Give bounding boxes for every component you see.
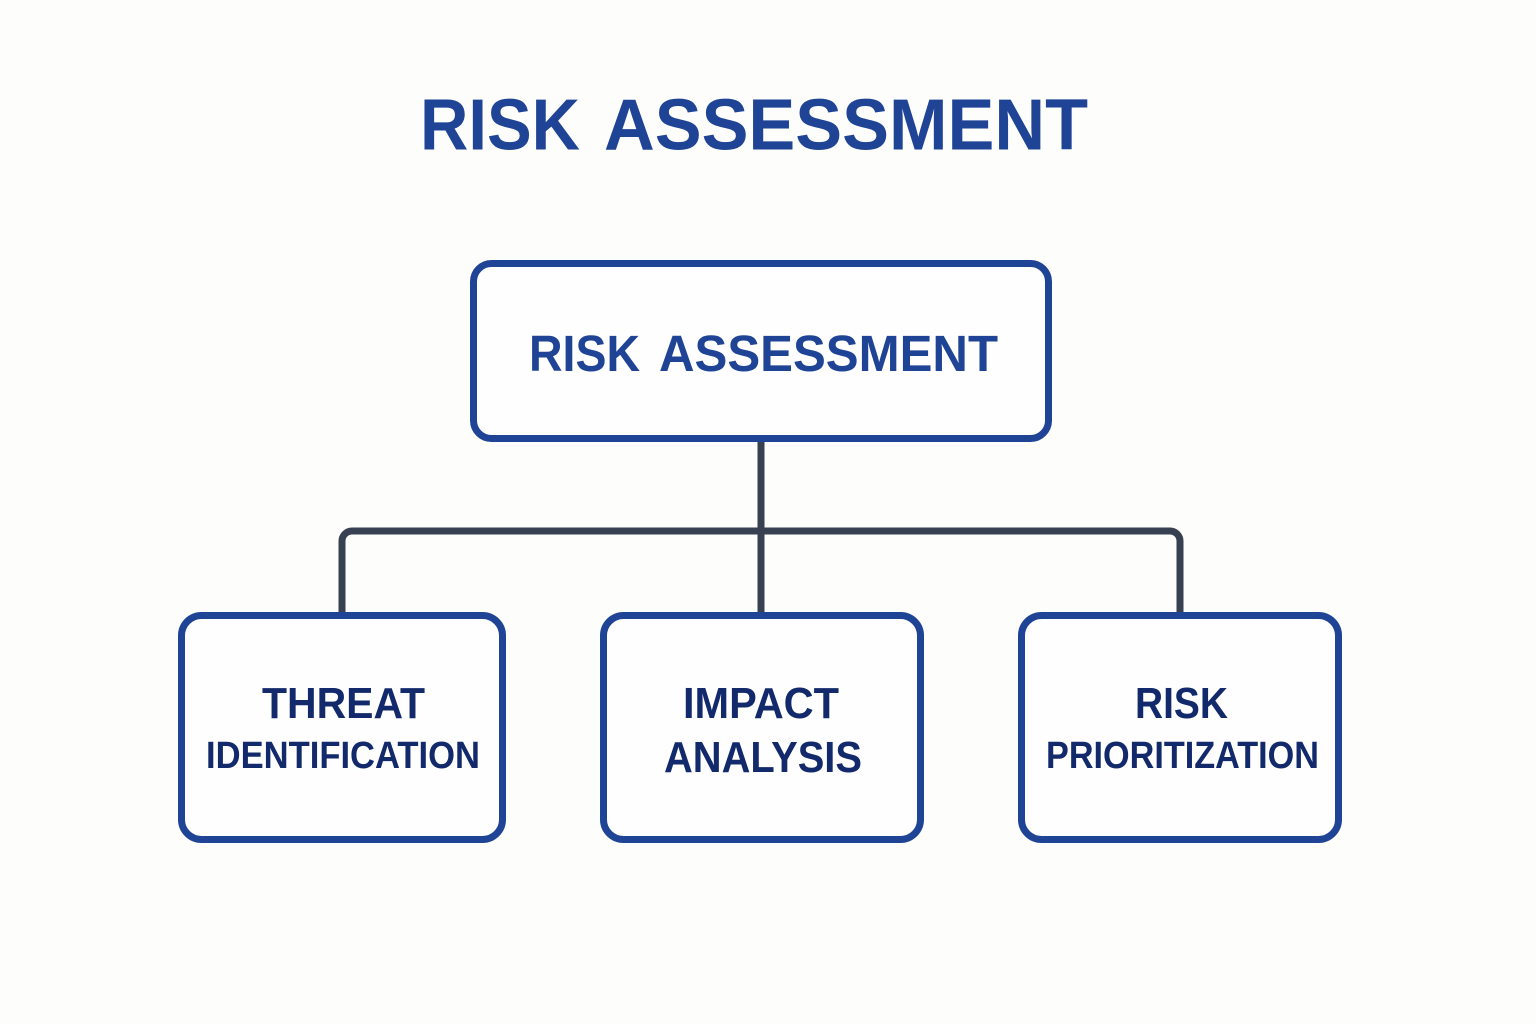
title: RISK xyxy=(420,86,580,166)
analysis label: ANALYSIS xyxy=(664,733,862,782)
panel: impact analysis xyxy=(604,616,920,840)
connector: tree lines xyxy=(342,440,1180,614)
root label: ASSESSMENT xyxy=(659,325,998,382)
threat label: THREAT xyxy=(262,679,425,728)
root label: RISK xyxy=(529,325,640,382)
panel: risk prioritization xyxy=(1022,616,1338,840)
impact label: IMPACT xyxy=(683,679,839,728)
prioritization label: PRIORITIZATION xyxy=(1046,735,1319,777)
panel: root box xyxy=(474,264,1048,438)
risk label: RISK xyxy=(1135,679,1228,728)
panel: threat identification xyxy=(182,616,502,840)
identification label: IDENTIFICATION xyxy=(206,735,480,777)
title: ASSESSMENT xyxy=(604,86,1088,166)
